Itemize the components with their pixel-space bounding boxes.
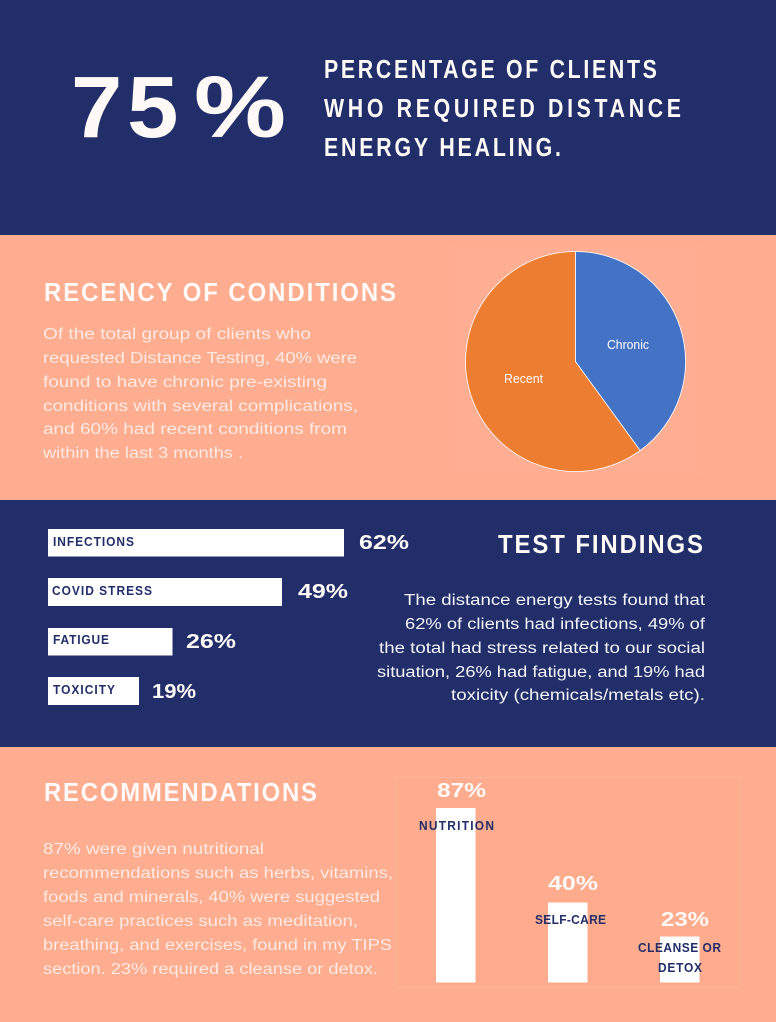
- panel: headline statistic: [0, 0, 776, 235]
- bar: infections 62%: 62%: [359, 532, 409, 554]
- headline description: WHO REQUIRED DISTANCE: [324, 94, 681, 124]
- column: nutrition 87%: [419, 780, 494, 982]
- bar: fatigue 26%: [48, 628, 236, 656]
- label: chronic: Chronic: [607, 338, 649, 352]
- pie slice: chronic 40%: [576, 251, 686, 450]
- text block: findings description: 62% of clients had infections, 49% of: [405, 616, 706, 633]
- column: self-care 40%: 40%: [548, 873, 598, 895]
- bar: infections 62%: INFECTIONS: [53, 535, 134, 549]
- bar: toxicity 19%: 19%: [152, 681, 196, 703]
- big number: 75%: 75: [71, 58, 178, 155]
- bar: infections 62%: [48, 529, 409, 556]
- bar: covid stress 49%: 49%: [298, 581, 348, 603]
- headline description: PERCENTAGE OF CLIENTS: [324, 55, 657, 85]
- text block: recency description: found to have chronic pre-existing: [43, 374, 327, 391]
- text block: recency description: requested Distance Testing, 40% were: [43, 350, 357, 367]
- text block: recommendations description: recommendations such as herbs, vitamins,: [43, 865, 393, 882]
- headline description: ENERGY HEALING.: [324, 133, 561, 163]
- bar: toxicity 19%: TOXICITY: [53, 683, 116, 697]
- label: recent: Recent: [504, 372, 544, 386]
- text block: recommendations description: [43, 841, 393, 978]
- text block: recency description: and 60% had recent conditions from: [43, 421, 347, 438]
- pie slice: recent 60%: [466, 252, 640, 472]
- text block: recommendations description: 87% were given nutritional: [43, 841, 264, 858]
- big number: 75%: [71, 58, 286, 156]
- panel: test findings: [0, 500, 776, 747]
- column: self-care 40%: SELF-CARE: [535, 913, 606, 927]
- column: self-care 40%: [535, 873, 606, 982]
- column: nutrition 87%: NUTRITION: [419, 819, 494, 833]
- text block: recommendations description: foods and minerals, 40% were suggested: [43, 889, 380, 906]
- bar: fatigue 26%: FATIGUE: [53, 633, 109, 647]
- bar: covid stress 49%: [48, 578, 348, 606]
- text block: findings description: situation, 26% had fatigue, and 19% had: [377, 664, 705, 681]
- panel: recency of conditions: [0, 235, 776, 500]
- panel: recommendations: [0, 747, 776, 1022]
- column: cleanse or detox 23%: 23%: [661, 909, 709, 931]
- text block: findings description: toxicity (chemicals/metals etc).: [451, 687, 705, 704]
- text block: recommendations description: section. 23% required a cleanse or detox.: [43, 961, 378, 978]
- column: cleanse or detox 23%: CLEANSE OR: [638, 941, 721, 955]
- heading: recency of conditions: RECENCY OF CONDITIONS: [44, 278, 396, 307]
- bar: fatigue 26%: 26%: [186, 631, 236, 653]
- big number: 75%: %: [194, 59, 286, 156]
- text block: recency description: within the last 3 months .: [42, 445, 243, 462]
- heading: recommendations: RECOMMENDATIONS: [44, 778, 317, 807]
- headline description: [324, 55, 681, 163]
- text block: recency description: Of the total group of clients who: [43, 326, 311, 343]
- text block: findings description: the total had stress related to our social: [379, 640, 705, 657]
- bar: toxicity 19%: [48, 677, 196, 705]
- text block: findings description: The distance energy tests found that: [404, 592, 706, 609]
- text block: recency description: conditions with several complications,: [43, 398, 358, 415]
- column chart: recommendations: [396, 778, 740, 986]
- bar: covid stress 49%: COVID STRESS: [52, 584, 152, 598]
- column: cleanse or detox 23%: [638, 909, 721, 982]
- text block: recency description: [42, 326, 358, 462]
- heading: test findings: TEST FINDINGS: [498, 530, 703, 559]
- pie chart: chronic vs recent: [450, 245, 701, 476]
- column: cleanse or detox 23%: DETOX: [658, 961, 703, 975]
- column: nutrition 87%: 87%: [437, 780, 486, 802]
- text block: recommendations description: self-care practices such as meditation,: [43, 913, 358, 930]
- text block: recommendations description: breathing, and exercises, found in my TIPS: [43, 937, 392, 954]
- bar chart: test findings: [48, 529, 409, 705]
- text block: findings description: [377, 592, 706, 704]
